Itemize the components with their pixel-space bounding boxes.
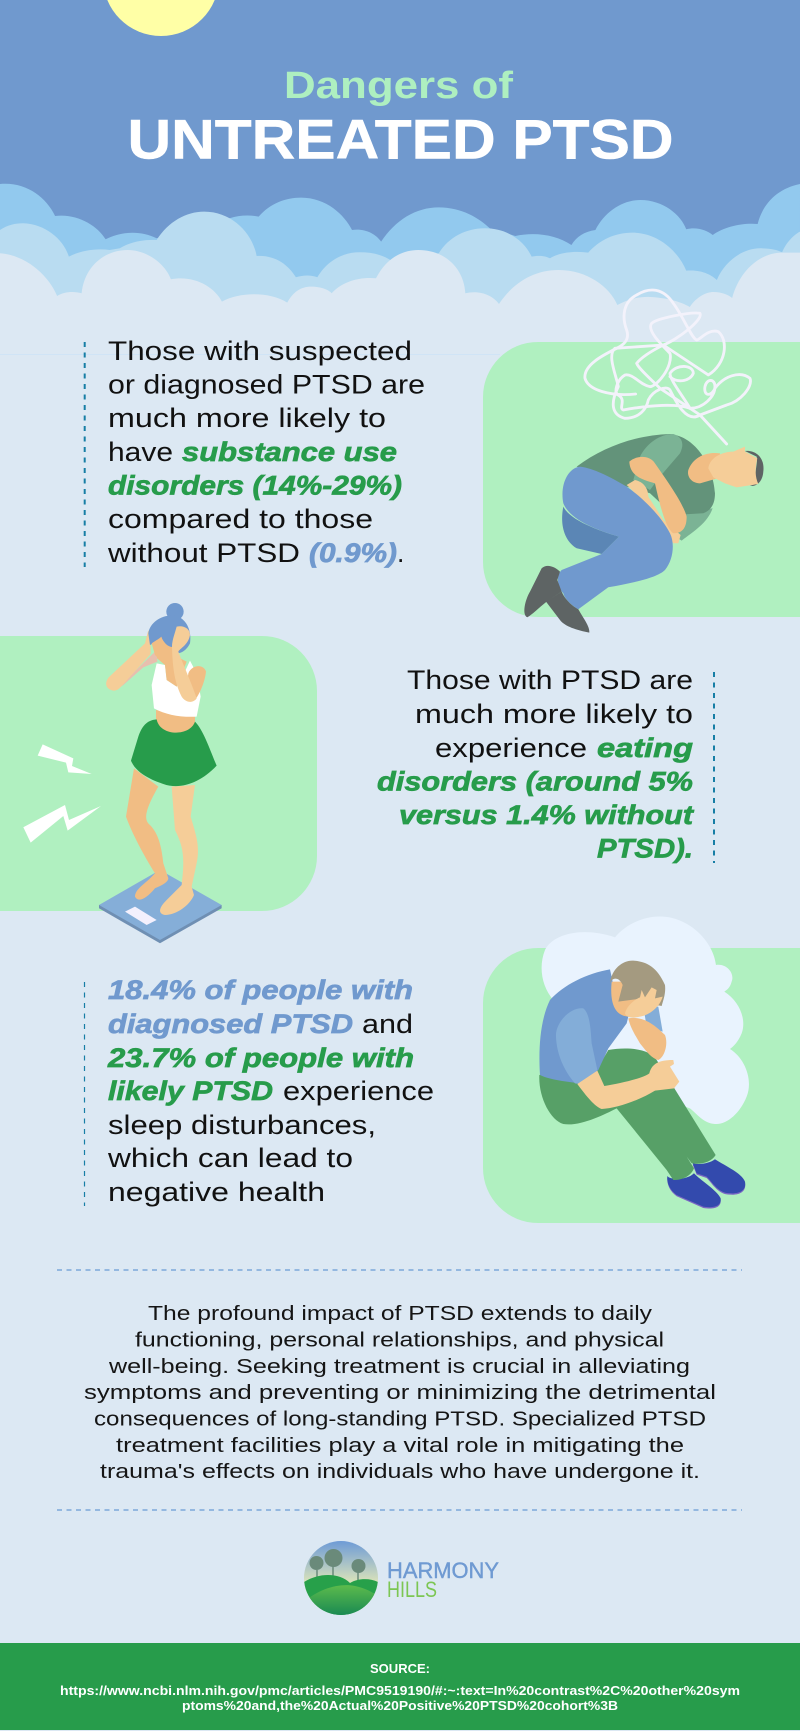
- text block: conclusion: functioning, personal relationships, and physical: [135, 1328, 664, 1352]
- text block: eating disorders: eating: [597, 733, 693, 763]
- green panel background: [483, 948, 800, 1223]
- text block: conclusion: trauma's effects on individuals who have undergone it.: [100, 1460, 700, 1483]
- text block: eating disorders: much more likely to: [415, 699, 693, 729]
- text block: conclusion: symptoms and preventing or minimizing the detrimental: [84, 1381, 716, 1404]
- text block: eating disorders: [377, 665, 714, 864]
- text block: eating disorders: versus 1.4% without: [399, 800, 694, 830]
- dashed rule: [84, 982, 86, 1206]
- text block: sleep disturbances: negative health: [108, 1177, 325, 1207]
- text block: substance use: Those with suspected: [108, 336, 412, 366]
- text block: substance use: or diagnosed PTSD are: [108, 370, 425, 400]
- text block: substance use: compared to those: [108, 504, 373, 534]
- text block: substance use: much more likely to: [108, 403, 386, 433]
- text block: conclusion: consequences of long-standing PTSD. Specialized PTSD: [94, 1408, 706, 1430]
- footer: source: https://www.ncbi.nlm.nih.gov/pmc/articles/PMC9519190/#:~:text=In%20contrast%2C%20other%20sym: [60, 1684, 740, 1698]
- text block: sleep disturbances: likely PTSD: [108, 1076, 273, 1106]
- green panel background: [483, 342, 800, 617]
- text block: eating disorders: disorders (around 5%: [377, 766, 693, 796]
- text block: substance use: [85, 336, 425, 568]
- text block: substance use: .: [397, 538, 404, 568]
- text block: substance use: without PTSD: [107, 538, 300, 568]
- illustration: man hugging knees with cloud: [539, 916, 749, 1209]
- text block: sleep disturbances: experience: [283, 1076, 434, 1106]
- text block: sleep disturbances: diagnosed PTSD: [108, 1009, 353, 1039]
- text block: eating disorders: Those with PTSD are: [407, 665, 693, 695]
- icon: sun: [103, 0, 219, 36]
- header sky: [0, 0, 800, 340]
- text block: eating disorders: experience: [435, 733, 587, 763]
- text block: conclusion: [57, 1270, 742, 1510]
- green panel background: [0, 636, 317, 911]
- title: [128, 65, 674, 171]
- text block: sleep disturbances: sleep disturbances,: [108, 1110, 376, 1140]
- dashed rule: [84, 342, 86, 567]
- text block: conclusion: well-being. Seeking treatment is crucial in alleviating: [108, 1355, 690, 1378]
- icon: logo badge: [304, 1541, 378, 1615]
- text block: substance use: disorders (14%-29%): [108, 470, 402, 500]
- logo: Harmony Hills: [304, 1541, 499, 1615]
- text block: sleep disturbances: and: [362, 1009, 413, 1039]
- logo wordmark: HARMONY: [387, 1558, 499, 1583]
- text block: conclusion: treatment facilities play a vital role in mitigating the: [116, 1434, 684, 1457]
- illustration: curled-up man with tangled thoughts: [524, 290, 764, 633]
- dashed rule: [713, 672, 715, 863]
- text block: sleep disturbances: 18.4% of people with: [108, 975, 413, 1005]
- text block: substance use: (0.9%): [309, 538, 397, 568]
- text block: sleep disturbances: which can lead to: [107, 1143, 353, 1173]
- footer: source: SOURCE:: [370, 1662, 430, 1676]
- logo wordmark: HILLS: [387, 1577, 437, 1602]
- clouds: [0, 184, 800, 340]
- title: Dangers of: [284, 65, 513, 107]
- footer: source: [0, 1643, 800, 1730]
- text block: sleep disturbances: [84, 975, 434, 1207]
- title: UNTREATED PTSD: [128, 108, 674, 171]
- text block: substance use: have: [108, 437, 173, 467]
- text block: sleep disturbances: 23.7% of people with: [107, 1043, 414, 1073]
- text block: substance use: substance use: [182, 437, 397, 467]
- text block: conclusion: The profound impact of PTSD extends to daily: [148, 1302, 653, 1325]
- logo wordmark: [387, 1558, 499, 1602]
- panel: sleep disturbances: [483, 916, 800, 1223]
- text block: eating disorders: PTSD).: [597, 834, 693, 864]
- illustration: woman on scale: [23, 603, 222, 943]
- panel: substance use: [483, 290, 800, 633]
- panel: eating disorders: [0, 603, 317, 943]
- footer: source: ptoms%20and,the%20Actual%20Positive%20PTSD%20cohort%3B: [182, 1699, 618, 1713]
